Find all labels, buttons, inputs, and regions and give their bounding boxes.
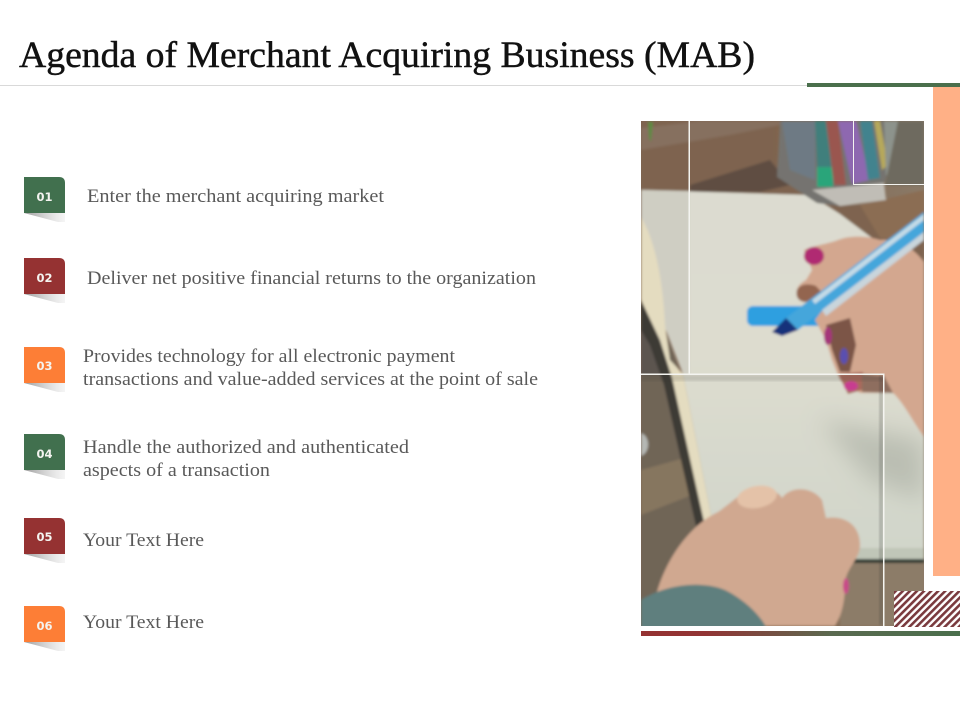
agenda item 01: Enter the merchant acquiring market <box>87 187 385 207</box>
header rule <box>0 83 960 87</box>
agenda item 03: transactions and value-added services at the point of sale <box>83 370 538 390</box>
agenda item 04: aspects of a transaction <box>83 461 270 481</box>
agenda item 03: 03 <box>36 359 53 373</box>
notebook page <box>682 189 924 550</box>
sleeve <box>641 585 768 630</box>
frame lines <box>641 121 924 626</box>
lower right wood <box>840 562 924 626</box>
overlay shadows <box>641 375 884 381</box>
agenda item 04 <box>24 434 410 481</box>
agenda item 03 <box>24 347 538 392</box>
agenda item 01 <box>24 177 385 222</box>
dark wood left <box>642 338 696 598</box>
page shading <box>641 190 689 374</box>
agenda item 02: 02 <box>36 271 53 285</box>
agenda item 06: 06 <box>36 619 53 633</box>
agenda item 01: 01 <box>36 190 53 204</box>
upper hand <box>797 237 924 437</box>
photo: hands writing in a notebook <box>641 121 924 630</box>
agenda item 04: 04 <box>36 447 53 461</box>
hatched accent block <box>894 591 960 627</box>
glass jar <box>777 121 898 206</box>
agenda item 05: Your Text Here <box>83 531 204 551</box>
blue pen cap on page <box>747 306 823 326</box>
agenda item 02 <box>24 258 536 303</box>
agenda item 02: Deliver net positive financial returns to the organization <box>87 269 536 289</box>
sprout <box>648 122 653 142</box>
nails <box>804 247 824 265</box>
title: Agenda of Merchant Acquiring Business (MAB) <box>19 35 755 76</box>
agenda item 03: Provides technology for all electronic payment <box>83 347 456 367</box>
agenda item 05: 05 <box>36 530 53 544</box>
agenda item 06: Your Text Here <box>83 613 204 633</box>
gradient strip under photo <box>641 631 960 636</box>
agenda item 06 <box>24 606 204 651</box>
lower hand <box>655 488 860 626</box>
peach accent panel <box>933 87 960 576</box>
grey object left <box>641 433 648 456</box>
pen <box>786 212 924 330</box>
agenda item 05 <box>24 518 204 563</box>
agenda item 04: Handle the authorized and authenticated <box>83 438 410 458</box>
book edge <box>641 217 712 522</box>
